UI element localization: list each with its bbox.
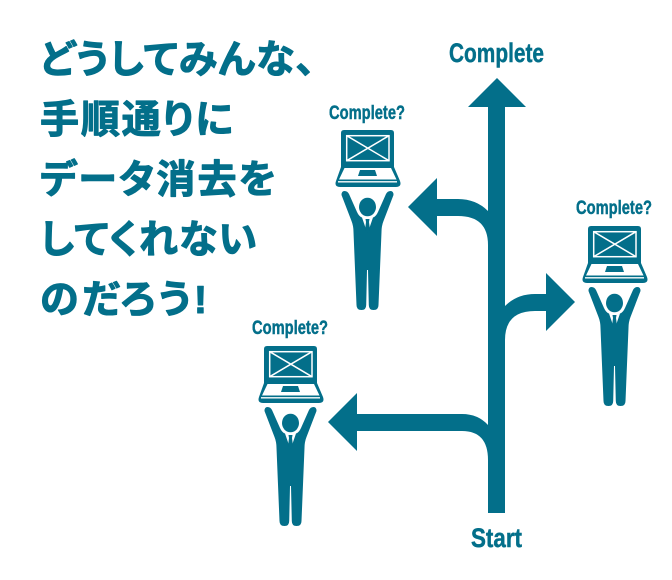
label: Complete?: Complete? (252, 318, 328, 339)
figure: person holding laptop, upper (329, 103, 405, 310)
heading: データ消去を (40, 158, 276, 202)
arrow: main path to Complete (468, 78, 526, 513)
icon: person and laptop (258, 346, 324, 526)
figure: person holding laptop, lower (252, 318, 328, 526)
label: Complete: Complete (449, 38, 544, 68)
arrow: right branch (505, 273, 575, 340)
arrow: upper left branch (408, 178, 488, 245)
heading: のだろう! (40, 279, 207, 322)
label: Complete?: Complete? (329, 103, 405, 124)
heading: どうしてみんな、 (40, 39, 315, 82)
heading: 手順通りに (40, 99, 233, 142)
label: Complete?: Complete? (576, 198, 652, 219)
label: Start: Start (471, 523, 522, 553)
icon: person and laptop (336, 130, 400, 310)
arrow: lower left branch (328, 393, 488, 460)
branching arrows diagram (328, 78, 575, 513)
figure: person holding laptop, right (576, 198, 652, 406)
icon: person and laptop (582, 226, 648, 406)
heading (40, 39, 315, 322)
heading: してくれない (40, 219, 257, 262)
